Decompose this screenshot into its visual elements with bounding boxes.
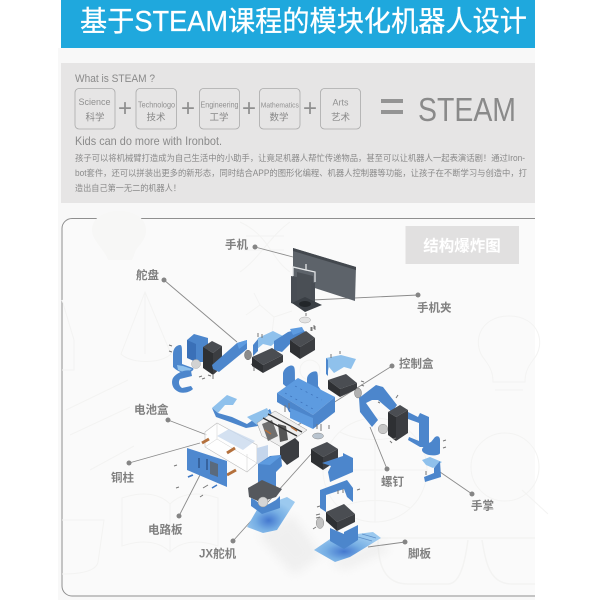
robot: torso [212, 365, 335, 429]
box: technology: Technologo [138, 100, 175, 110]
panel: what is STEAM [61, 63, 535, 203]
leader line: phone clip [312, 295, 418, 300]
box: engineering: 工学 [209, 112, 229, 124]
box: science: 科学 [85, 112, 105, 124]
label: foot plate: 脚板 [408, 546, 431, 560]
title banner [61, 0, 535, 48]
page background [58, 48, 535, 600]
label: foot plate [402, 540, 431, 560]
foot shadows [258, 515, 390, 575]
label: copper post [111, 460, 134, 484]
robot: right arm [359, 385, 446, 482]
leader line: battery box [168, 420, 207, 435]
result: STEAM: STEAM [418, 91, 516, 128]
box: arts: 艺术 [331, 112, 350, 124]
leader line: foot plate [368, 542, 405, 547]
plus: + [303, 95, 317, 122]
leader line: palm [440, 472, 472, 494]
box: arts [320, 88, 360, 129]
robot: left arm [169, 334, 253, 393]
leader line: JX servo [233, 453, 312, 541]
leader line: control box [290, 366, 392, 430]
robot: right leg [311, 442, 381, 562]
box: technology [136, 88, 176, 129]
label: servo horn: 舵盘 [136, 268, 159, 282]
body text: 造出自己第一无二的机器人！ [75, 182, 181, 193]
faint background doodles [62, 211, 548, 584]
label: JX servo: JX舵机 [199, 546, 237, 560]
label: battery box [134, 402, 170, 422]
clip [291, 264, 322, 312]
robot: electronics core [257, 408, 329, 465]
heading: what is STEAM: What is STEAM ? [75, 73, 155, 85]
label: control box: 控制盒 [399, 356, 434, 370]
box: science: Science [78, 97, 111, 107]
robot: upper right arm servo [326, 351, 364, 398]
label: phone: 手机 [225, 238, 248, 252]
box: mathematics: 数学 [269, 112, 289, 124]
plus: + [181, 95, 195, 122]
label: servo horn [136, 268, 166, 282]
leader line: phone [255, 247, 293, 257]
body text: bot套件，还可以拼装出更多的新形态，同时结合APP的图形化编程、机器人控制器等功能，让孩子在不断学习与创造中，打 [75, 167, 527, 178]
label: control box [390, 356, 434, 370]
plus: + [242, 95, 256, 122]
subheading: Kids can do more with Ironbot. [75, 134, 222, 148]
equals sign [381, 99, 403, 114]
label: palm [470, 492, 494, 512]
label: phone clip [416, 292, 452, 314]
title banner: 基于STEAM课程的模块化机器人设计 [80, 6, 527, 38]
body text: 孩子可以将机械臂打造成为自己生活中的小助手，让竟足机器人帮忙传递物品，甚至可以让机器人一起表演话剧！通过Iron- [75, 152, 525, 163]
label: phone clip: 手机夹 [417, 300, 452, 314]
badge: structure explosion: 结构爆炸图 [423, 236, 501, 255]
label: battery box: 电池盒 [134, 402, 169, 416]
phone [293, 248, 356, 301]
plus: + [118, 95, 132, 122]
box: mathematics [260, 88, 300, 129]
label: palm: 手掌 [471, 498, 494, 512]
label: screw: 螺钉 [381, 474, 404, 488]
leader line: circuit board [179, 475, 200, 516]
robot: battery box [205, 423, 268, 472]
box: technology: 技术 [146, 112, 166, 124]
label: copper post: 铜柱 [111, 470, 134, 484]
box: arts: Arts [332, 98, 349, 108]
box: engineering [200, 88, 240, 129]
badge: structure explosion [406, 226, 519, 264]
label: JX servo [199, 538, 237, 560]
panel: exploded diagram frame [62, 218, 535, 596]
body text [75, 152, 527, 193]
label: circuit board [148, 514, 183, 536]
label: phone [225, 238, 258, 252]
label: screw [381, 466, 404, 488]
robot: phone and clip [291, 248, 356, 331]
leader line: screw [370, 427, 387, 469]
robot: circuit board [174, 448, 227, 497]
robot: copper posts [202, 439, 236, 475]
box: mathematics: Mathematics [261, 100, 299, 110]
robot: head block [252, 326, 315, 373]
label: circuit board: 电路板 [148, 522, 183, 536]
robot: left leg [247, 455, 295, 533]
box: engineering: Engineering [200, 100, 238, 110]
leader line: servo horn [164, 280, 237, 342]
box: science [75, 88, 115, 129]
leader line: copper post [129, 443, 200, 463]
